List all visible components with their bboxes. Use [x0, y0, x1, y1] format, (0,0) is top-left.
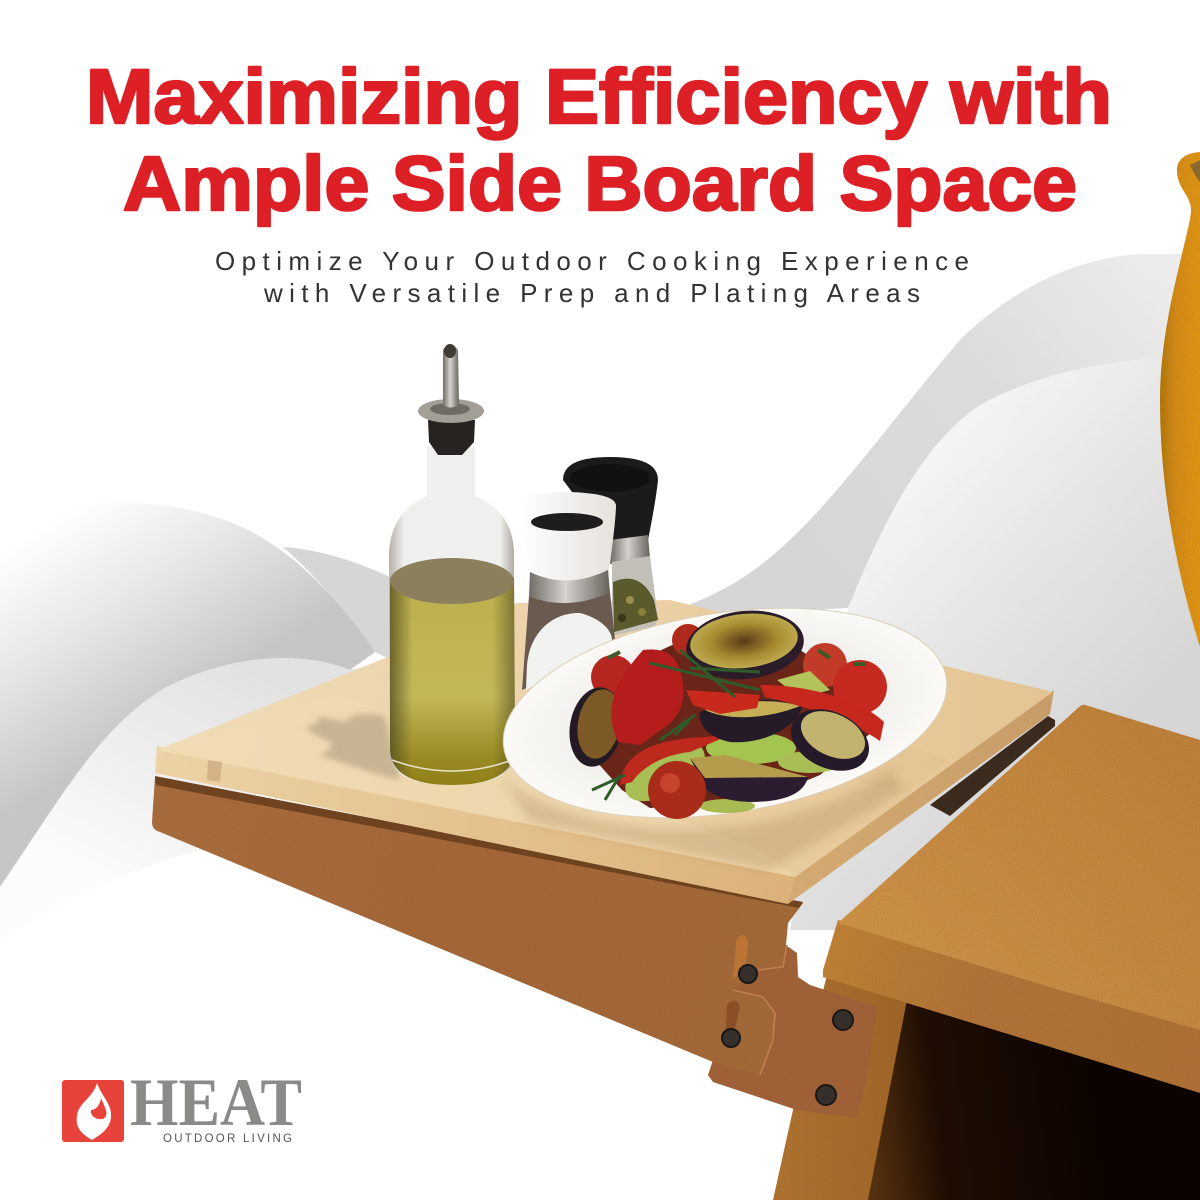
tomato stems — [608, 650, 866, 664]
food base — [590, 632, 872, 808]
metal collar — [418, 399, 484, 423]
board right edge — [788, 690, 1054, 904]
background: grey swoosh waves — [0, 254, 1200, 940]
bottom eggplant — [690, 758, 808, 802]
side rail behind box — [930, 716, 1055, 816]
subtitle: with Versatile Prep and Plating Areas — [263, 278, 920, 308]
metal tray: under side board — [152, 776, 803, 1075]
black pepper grinder — [563, 457, 658, 636]
tray lobe highlight — [733, 990, 775, 1075]
middle eggplant — [700, 700, 802, 742]
board front edge — [155, 746, 795, 904]
red pepper — [611, 650, 683, 745]
left eggplant — [563, 683, 629, 771]
board top — [157, 600, 1053, 877]
front tomato — [648, 761, 706, 819]
metal spout — [443, 344, 459, 408]
logo tagline: OUTDOOR LIVING — [163, 1133, 292, 1145]
slots in tray — [733, 935, 748, 980]
white salt grinder — [518, 492, 616, 690]
zucchini slices — [777, 671, 830, 698]
rosemary sprigs — [592, 650, 760, 800]
title — [86, 54, 1112, 227]
logo flame icon — [62, 1080, 124, 1142]
hinge bracket — [708, 940, 877, 1118]
wood grain strips — [157, 694, 795, 877]
red pepper strip right — [760, 685, 884, 741]
black stopper — [428, 420, 475, 455]
white plate — [488, 579, 962, 847]
box post — [773, 975, 910, 1200]
box top — [838, 705, 1200, 1030]
logo: HEAT Outdoor Living — [62, 1064, 302, 1145]
plate shadow — [500, 770, 905, 870]
tomatoes back — [591, 655, 635, 699]
red pepper strip center — [686, 690, 760, 714]
right eggplant — [781, 697, 879, 783]
metal box: fire pit base at right — [773, 705, 1200, 1200]
oil surface — [390, 558, 514, 604]
top eggplant — [683, 605, 807, 685]
side board: wooden cutting board — [155, 600, 1054, 904]
title: Ample Side Board Space — [123, 141, 1077, 227]
bottle body — [389, 447, 515, 785]
logo wordmark: HEAT — [130, 1064, 302, 1140]
bracket bolts — [722, 965, 853, 1105]
vase: orange pot at right edge — [1160, 152, 1200, 647]
dark opening — [868, 1000, 1200, 1200]
subtitle: Optimize Your Outdoor Cooking Experience — [215, 246, 969, 276]
title: Maximizing Efficiency with — [86, 54, 1112, 140]
subtitle — [215, 246, 969, 308]
glass bottle with olive oil — [389, 344, 515, 785]
olive oil — [390, 578, 515, 785]
hand-shaped shadow on board — [305, 714, 400, 780]
plate with grilled vegetables — [488, 579, 962, 847]
box front face — [823, 920, 1200, 1093]
